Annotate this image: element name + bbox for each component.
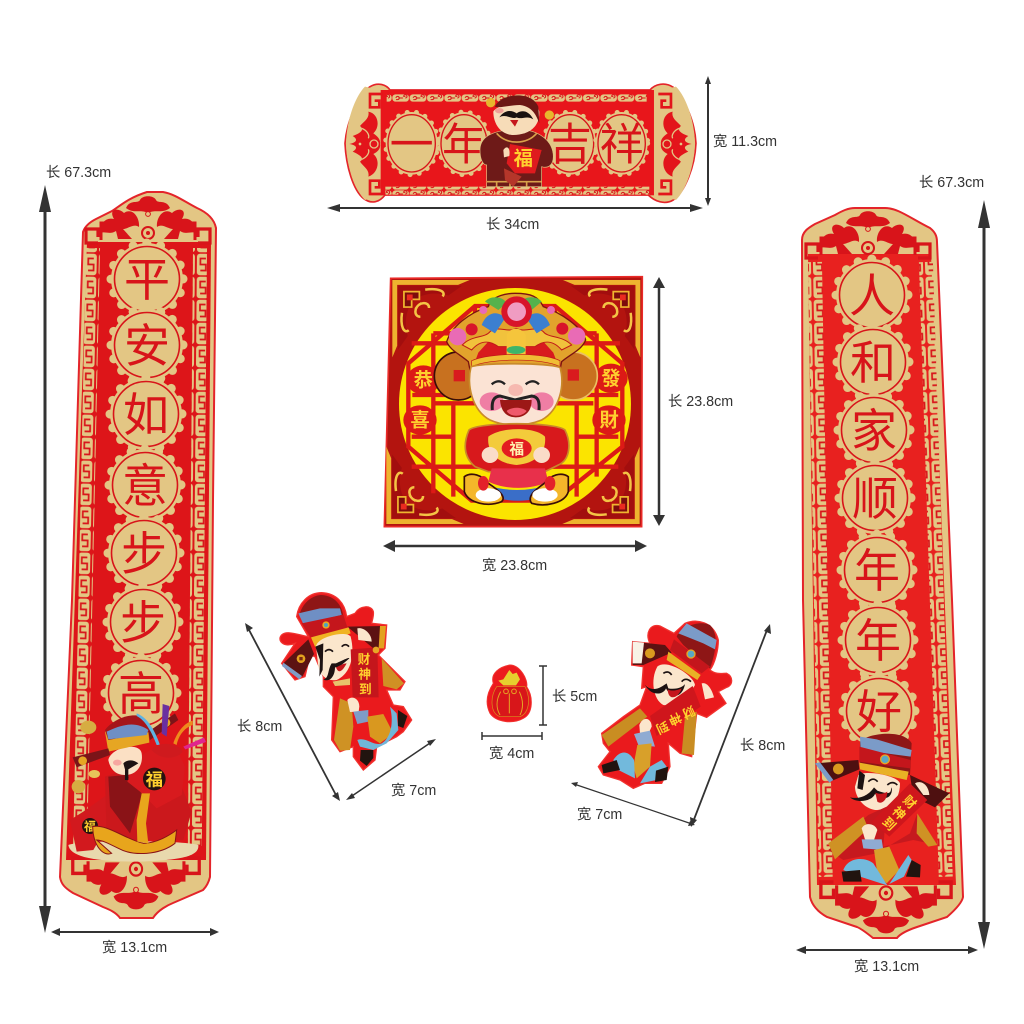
couplet outline xyxy=(802,208,963,938)
medallion: 年: 年 xyxy=(442,120,486,169)
label: 恭: 恭 xyxy=(414,370,433,392)
medallion: 意 xyxy=(109,449,181,521)
figure: god of wealth with scroll: 财 xyxy=(900,793,919,812)
label: 长 67.3cm: 长 67.3cm xyxy=(919,174,984,191)
label: 长 34cm: 长 34cm xyxy=(486,216,539,233)
medallion: 步 xyxy=(107,586,179,658)
medallion: 吉 xyxy=(544,112,596,175)
figure: god of wealth with red envelope xyxy=(480,95,554,187)
figure: god of wealth with scroll: 神 xyxy=(889,803,909,823)
dimension: left banner width xyxy=(51,928,219,956)
medallion: 如 xyxy=(110,378,182,450)
dimension: right banner width xyxy=(796,946,978,975)
figure: god of wealth with 福: 福 xyxy=(84,820,96,834)
figure: god of wealth with scroll: 到 xyxy=(879,815,898,834)
medallion: 步 xyxy=(108,517,180,589)
meander borders xyxy=(73,248,207,846)
meander bars xyxy=(385,94,649,195)
banner text: 财 xyxy=(358,652,371,666)
couplet outline xyxy=(60,192,216,918)
medallion: 高: 高 xyxy=(118,668,164,720)
sticker: right small god of wealth: 神 xyxy=(666,710,684,729)
couplet red panel xyxy=(66,242,211,860)
medallion: 祥 xyxy=(596,112,648,175)
banner red panel xyxy=(381,90,654,195)
medallion: 年: 年 xyxy=(854,545,900,597)
medallion: 年: 年 xyxy=(855,615,901,667)
corner: bottom-left xyxy=(386,447,464,524)
medallion: 年 xyxy=(841,534,913,606)
medallion: 顺 xyxy=(839,462,911,534)
bottom ornament xyxy=(821,882,951,933)
couplet red panel xyxy=(808,254,956,885)
label: 长 23.8cm: 长 23.8cm xyxy=(668,393,733,410)
dimension: pouch width xyxy=(482,732,542,762)
label: 宽 4cm: 宽 4cm xyxy=(489,745,534,762)
bottom ornament xyxy=(73,858,199,909)
dimension: right banner length xyxy=(919,174,990,949)
corner: top-right xyxy=(563,280,640,357)
figure: laughing child god xyxy=(434,293,597,505)
medallion: 如: 如 xyxy=(123,389,169,441)
medallion: 安: 安 xyxy=(124,320,170,372)
dimension: left banner length xyxy=(39,164,111,933)
label: 宽 7cm: 宽 7cm xyxy=(577,806,622,823)
figure: god of wealth with scroll xyxy=(815,734,949,885)
sticker: right small god of wealth: 财 xyxy=(679,703,697,721)
label: 財: 財 xyxy=(599,410,619,432)
medallion: 家: 家 xyxy=(851,405,897,457)
banner outline xyxy=(345,84,696,202)
label: 財 xyxy=(592,405,626,435)
medallion: 高 xyxy=(105,657,177,729)
medallion: 平 xyxy=(111,243,183,315)
banner text: 到 xyxy=(359,682,372,696)
label: 宽 11.3cm: 宽 11.3cm xyxy=(713,133,777,150)
dimension: right sticker width xyxy=(571,782,695,826)
label: 喜 xyxy=(403,405,437,435)
poster: square door god xyxy=(384,277,642,527)
dimension: pouch height xyxy=(539,666,597,725)
medallion: 好: 好 xyxy=(856,686,902,738)
figure: laughing child god: 福 xyxy=(509,441,524,458)
dimension: top banner width xyxy=(705,76,777,206)
left end ornament xyxy=(346,87,383,200)
figure: god of wealth with 福: 福 xyxy=(146,769,163,789)
sticker: right small god of wealth xyxy=(598,621,732,788)
medallion: 人: 人 xyxy=(849,270,895,322)
sticker: lucky red pouch xyxy=(487,665,531,722)
label: 宽 23.8cm: 宽 23.8cm xyxy=(482,557,547,574)
top ornament xyxy=(806,211,930,258)
banner text: 神 xyxy=(358,666,371,681)
top ornament xyxy=(86,196,210,243)
label: 长 8cm: 长 8cm xyxy=(237,718,282,735)
medallion: 和 xyxy=(837,326,909,398)
medallion: 年 xyxy=(842,604,914,676)
medallion: 祥: 祥 xyxy=(600,120,644,169)
label: 喜: 喜 xyxy=(410,410,430,432)
label: 长 8cm: 长 8cm xyxy=(740,737,785,754)
right end ornament xyxy=(658,87,695,200)
poster background xyxy=(384,277,642,527)
medallion: 吉: 吉 xyxy=(548,120,592,169)
medallion: 人 xyxy=(836,259,908,331)
banner text xyxy=(358,652,372,696)
meander borders xyxy=(808,262,953,877)
label: 發: 發 xyxy=(601,368,621,390)
medallion: 顺: 顺 xyxy=(852,473,898,525)
medallion: 家 xyxy=(838,394,910,466)
label: 發 xyxy=(594,364,628,393)
dimension: left sticker length xyxy=(237,623,340,801)
medallion: 和: 和 xyxy=(850,337,896,389)
dimension: right sticker length xyxy=(690,624,785,827)
label: 宽 13.1cm: 宽 13.1cm xyxy=(854,958,919,975)
red lattice xyxy=(408,306,622,501)
couplet: right banner xyxy=(802,208,963,938)
sticker: left small god of wealth xyxy=(280,593,412,770)
medallion: 年 xyxy=(439,112,489,175)
medallion: 一: 一 xyxy=(390,120,434,169)
label: 长 67.3cm: 长 67.3cm xyxy=(46,164,111,181)
couplet: left banner xyxy=(60,192,216,918)
medallion: 步: 步 xyxy=(121,528,167,580)
label: 宽 13.1cm: 宽 13.1cm xyxy=(102,939,167,956)
medallion: 步: 步 xyxy=(120,597,166,649)
dimension: poster height xyxy=(653,277,733,526)
medallion: 安 xyxy=(111,309,183,381)
label: 宽 7cm: 宽 7cm xyxy=(391,782,436,799)
corner: top-left xyxy=(392,280,470,357)
figure: god of wealth with red envelope: 福 xyxy=(514,148,533,170)
figure: god of wealth with 福 xyxy=(68,704,206,862)
corner: bottom-right xyxy=(562,447,640,524)
medallion: 一 xyxy=(386,112,438,175)
dimension: poster width xyxy=(383,540,647,574)
label: 长 5cm: 长 5cm xyxy=(552,688,597,705)
banner: top horizontal 一年吉祥 xyxy=(345,84,696,202)
label: 恭 xyxy=(407,365,440,395)
medallion: 意: 意 xyxy=(122,460,168,512)
medallion: 平: 平 xyxy=(124,254,170,306)
dimension: top banner length xyxy=(327,204,703,233)
medallion: 好 xyxy=(843,675,915,747)
yellow circle xyxy=(399,288,631,520)
sticker: right small god of wealth: 到 xyxy=(654,718,671,736)
dimension: left sticker width xyxy=(346,739,436,800)
